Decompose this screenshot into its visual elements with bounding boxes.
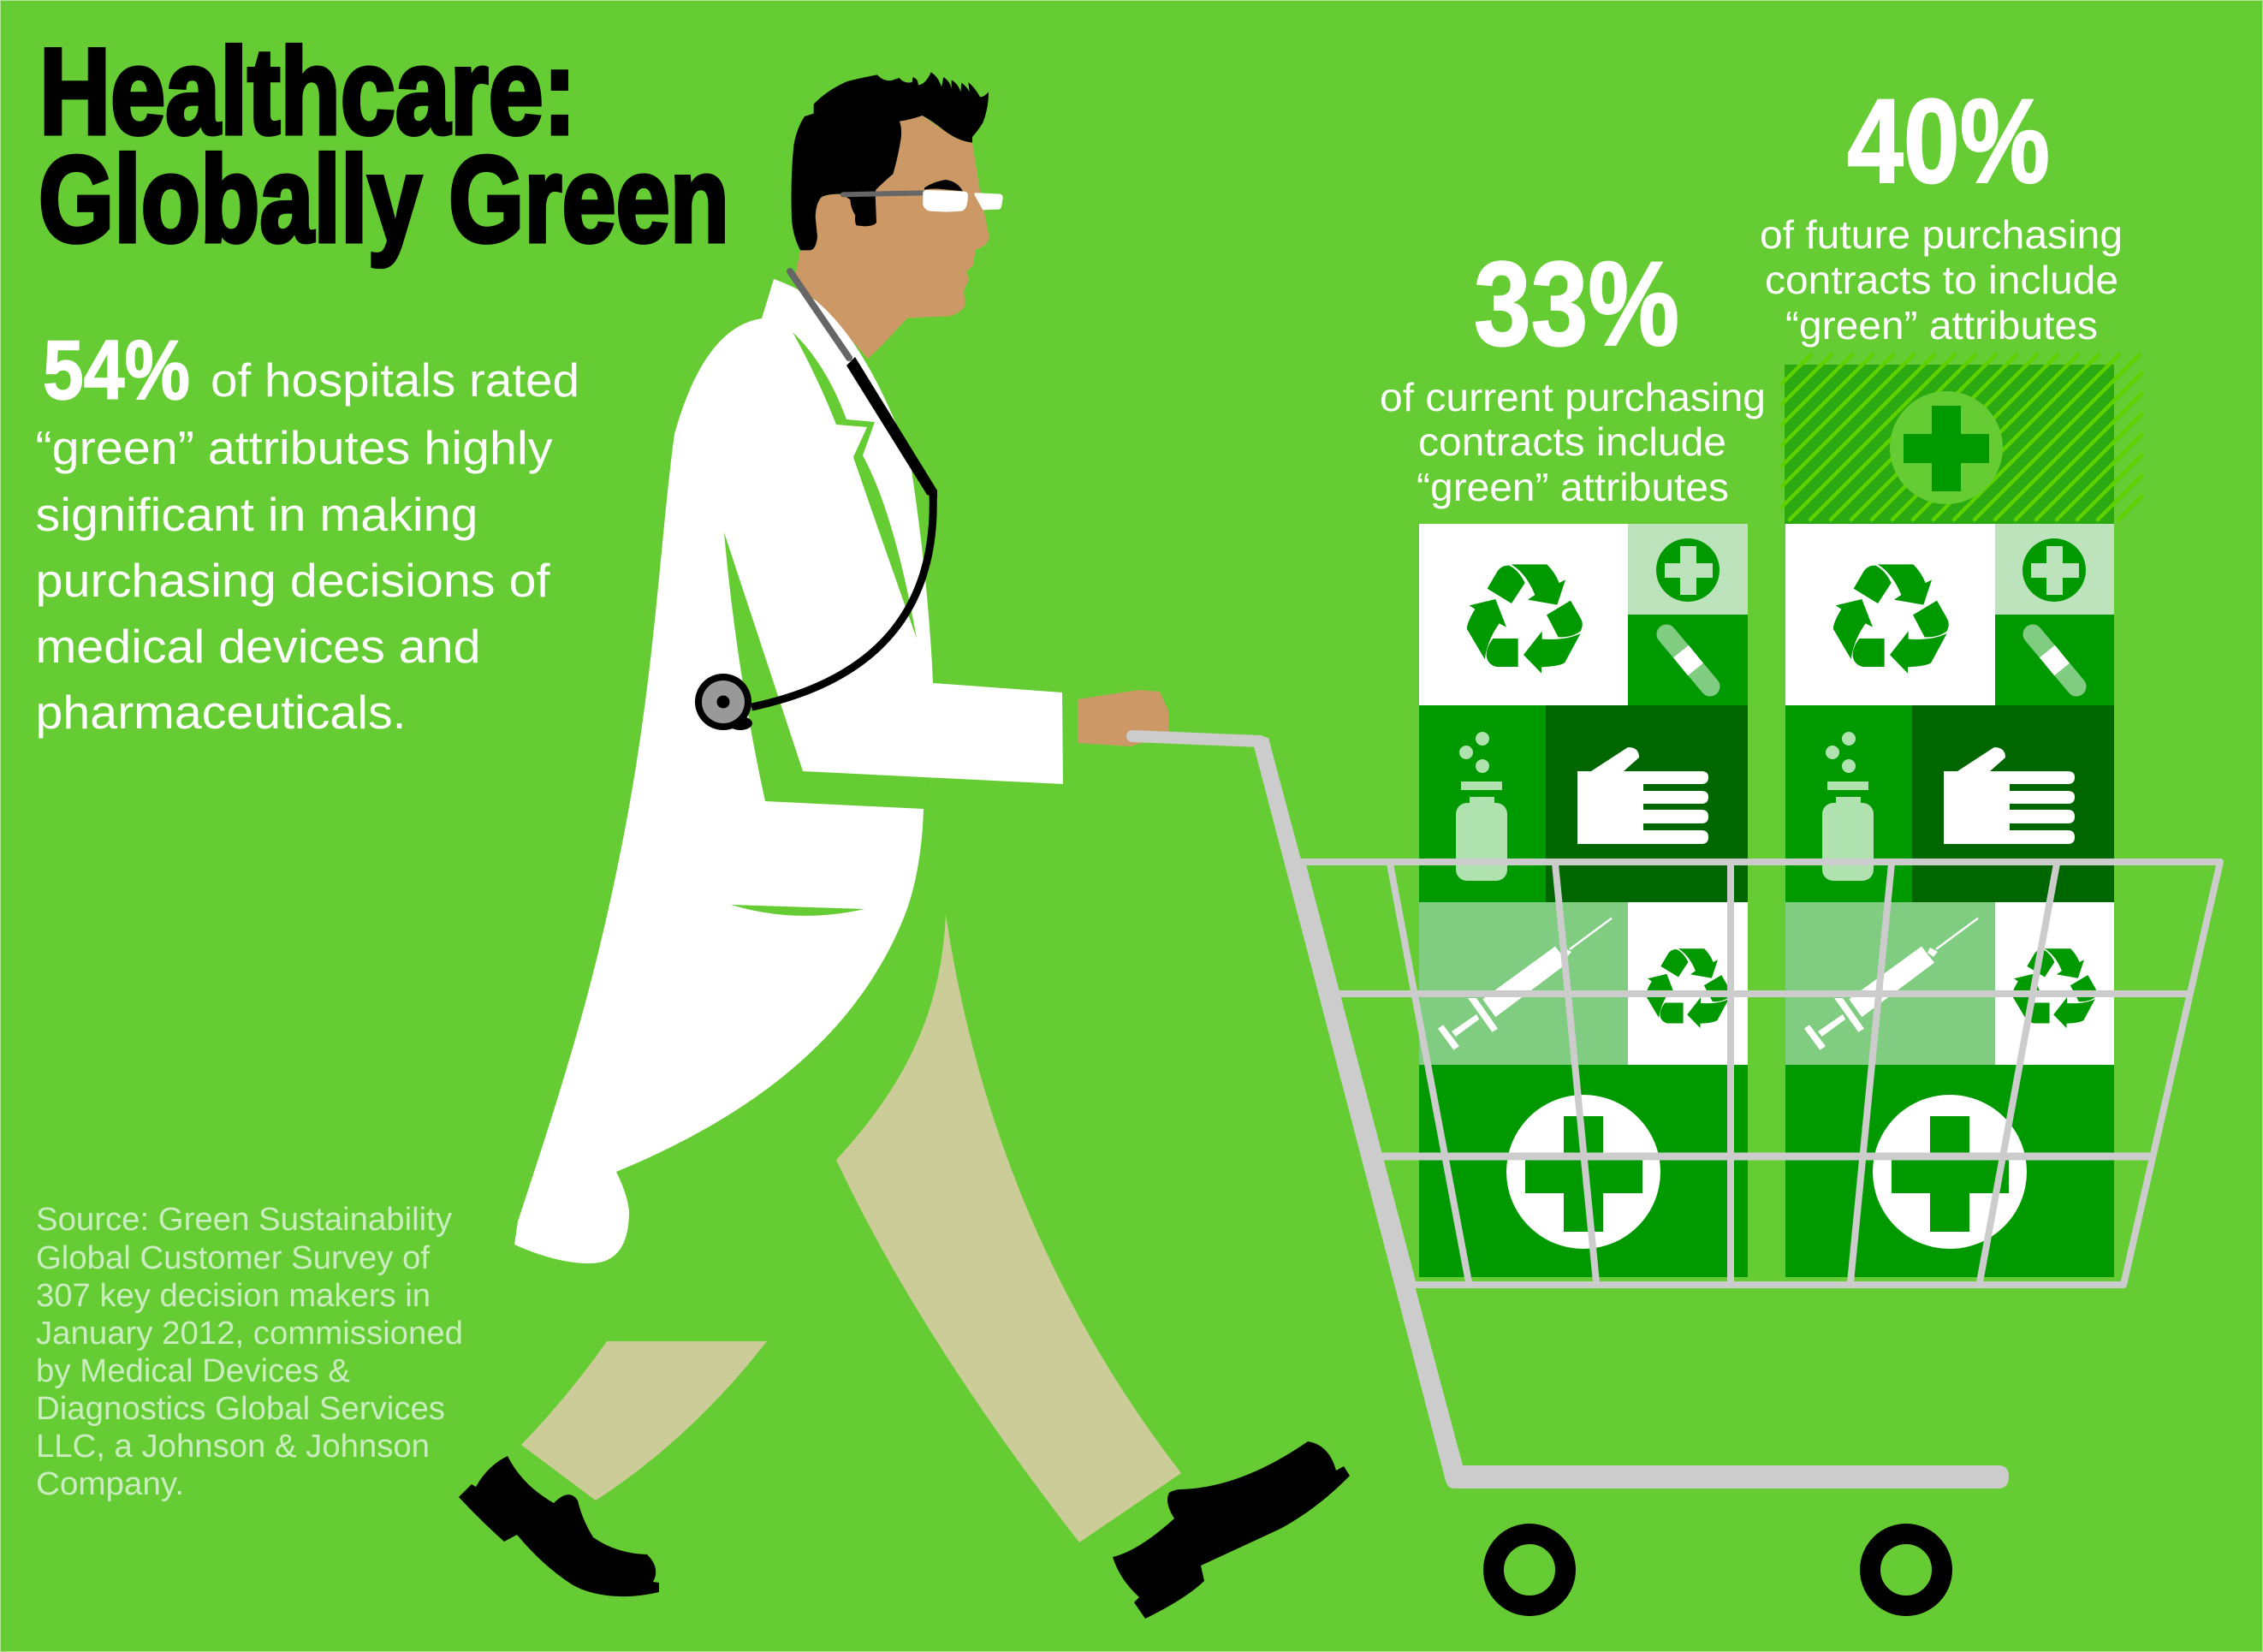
coat lapel line: [793, 332, 917, 639]
text block: 54% of hospitals: significant in making: [36, 488, 478, 541]
tile: glove: [1912, 705, 2114, 902]
tile: syringe: [1785, 902, 1995, 1065]
source note: Company.: [36, 1466, 184, 1502]
text block: 54% of hospitals: pharmaceuticals.: [36, 686, 406, 739]
text block: 54% of hospitals: of hospitals rated: [211, 354, 579, 407]
tile: glove: [1546, 705, 1748, 902]
source note: Diagnostics Global Services: [36, 1391, 445, 1427]
hand: [1078, 690, 1168, 746]
tile: recycle: [1785, 524, 1995, 705]
coat pocket: [731, 905, 864, 916]
cart frame: [1254, 735, 2009, 1489]
source note: 307 key decision makers in: [36, 1278, 431, 1314]
glasses: [843, 190, 1003, 211]
stethoscope: [695, 271, 937, 730]
source note: January 2012, commissioned: [36, 1316, 463, 1352]
sleeve gap: [724, 532, 933, 809]
caption: current purchasing contracts: contracts include: [1418, 419, 1726, 464]
tile: small recycle: [1995, 902, 2114, 1065]
caption: current purchasing contracts: of current purchasing: [1380, 375, 1766, 419]
caption: current purchasing contracts: “green” attributes: [1417, 465, 1729, 509]
source note: Global Customer Survey of: [36, 1240, 430, 1276]
source note: LLC, a Johnson & Johnson: [36, 1429, 430, 1465]
shopping cart: [1132, 735, 2220, 1606]
caption: future purchasing contracts: contracts to include: [1765, 258, 2118, 302]
tile: bandage: [1995, 615, 2114, 705]
stack: current purchasing: [1419, 524, 1748, 1277]
caption: future purchasing contracts: “green” attributes: [1785, 303, 2098, 348]
stat: 40%: 40%: [1847, 74, 2050, 208]
tile: small cross: [1995, 524, 2114, 615]
tile: large cross: [1419, 1065, 1748, 1277]
source note: Source: Green Sustainability: [36, 1202, 452, 1238]
source note: [36, 1202, 463, 1502]
hair: [792, 72, 989, 250]
face and neck: [794, 116, 989, 359]
caption: current purchasing contracts: [1380, 375, 1766, 509]
left wheel: [1494, 1534, 1565, 1606]
right wheel: [1870, 1534, 1942, 1606]
source note: by Medical Devices &: [36, 1353, 350, 1389]
front shoe: [1113, 1441, 1350, 1619]
text block: 54% of hospitals: purchasing decisions of: [36, 554, 550, 607]
tile: bottle: [1785, 705, 1912, 902]
stat: 54%: 54%: [43, 323, 190, 417]
tile: bottle: [1419, 705, 1546, 902]
cart handle: [1132, 736, 1260, 741]
doctor figure: [459, 72, 1350, 1619]
back trouser leg: [521, 1341, 767, 1500]
stat: 33%: 33%: [1474, 236, 1679, 371]
tile: small recycle: [1628, 902, 1748, 1065]
cart basket wires: [1302, 862, 2220, 1285]
back shoe: [459, 1456, 659, 1596]
text block: 54% of hospitals: “green” attributes highly: [36, 421, 553, 474]
tile: syringe: [1419, 902, 1628, 1065]
caption: future purchasing contracts: of future purchasing: [1760, 212, 2123, 257]
title: Globally Green: [39, 132, 729, 268]
title: [39, 24, 729, 268]
caption: future purchasing contracts: [1760, 212, 2123, 348]
future block: hatched cross: [1782, 354, 2141, 524]
text block: 54% of hospitals: medical devices and: [36, 620, 481, 673]
tile: large cross: [1785, 1065, 2114, 1277]
stack: future purchasing: [1785, 524, 2114, 1277]
tile: recycle: [1419, 524, 1628, 705]
title: Healthcare:: [39, 24, 576, 160]
white coat: [514, 279, 1063, 1263]
eyebrow: [924, 180, 963, 191]
tile: small cross: [1628, 524, 1748, 615]
front trouser leg: [836, 914, 1181, 1542]
text block: 54% of hospitals: [36, 323, 579, 739]
tile: bandage: [1628, 615, 1748, 705]
